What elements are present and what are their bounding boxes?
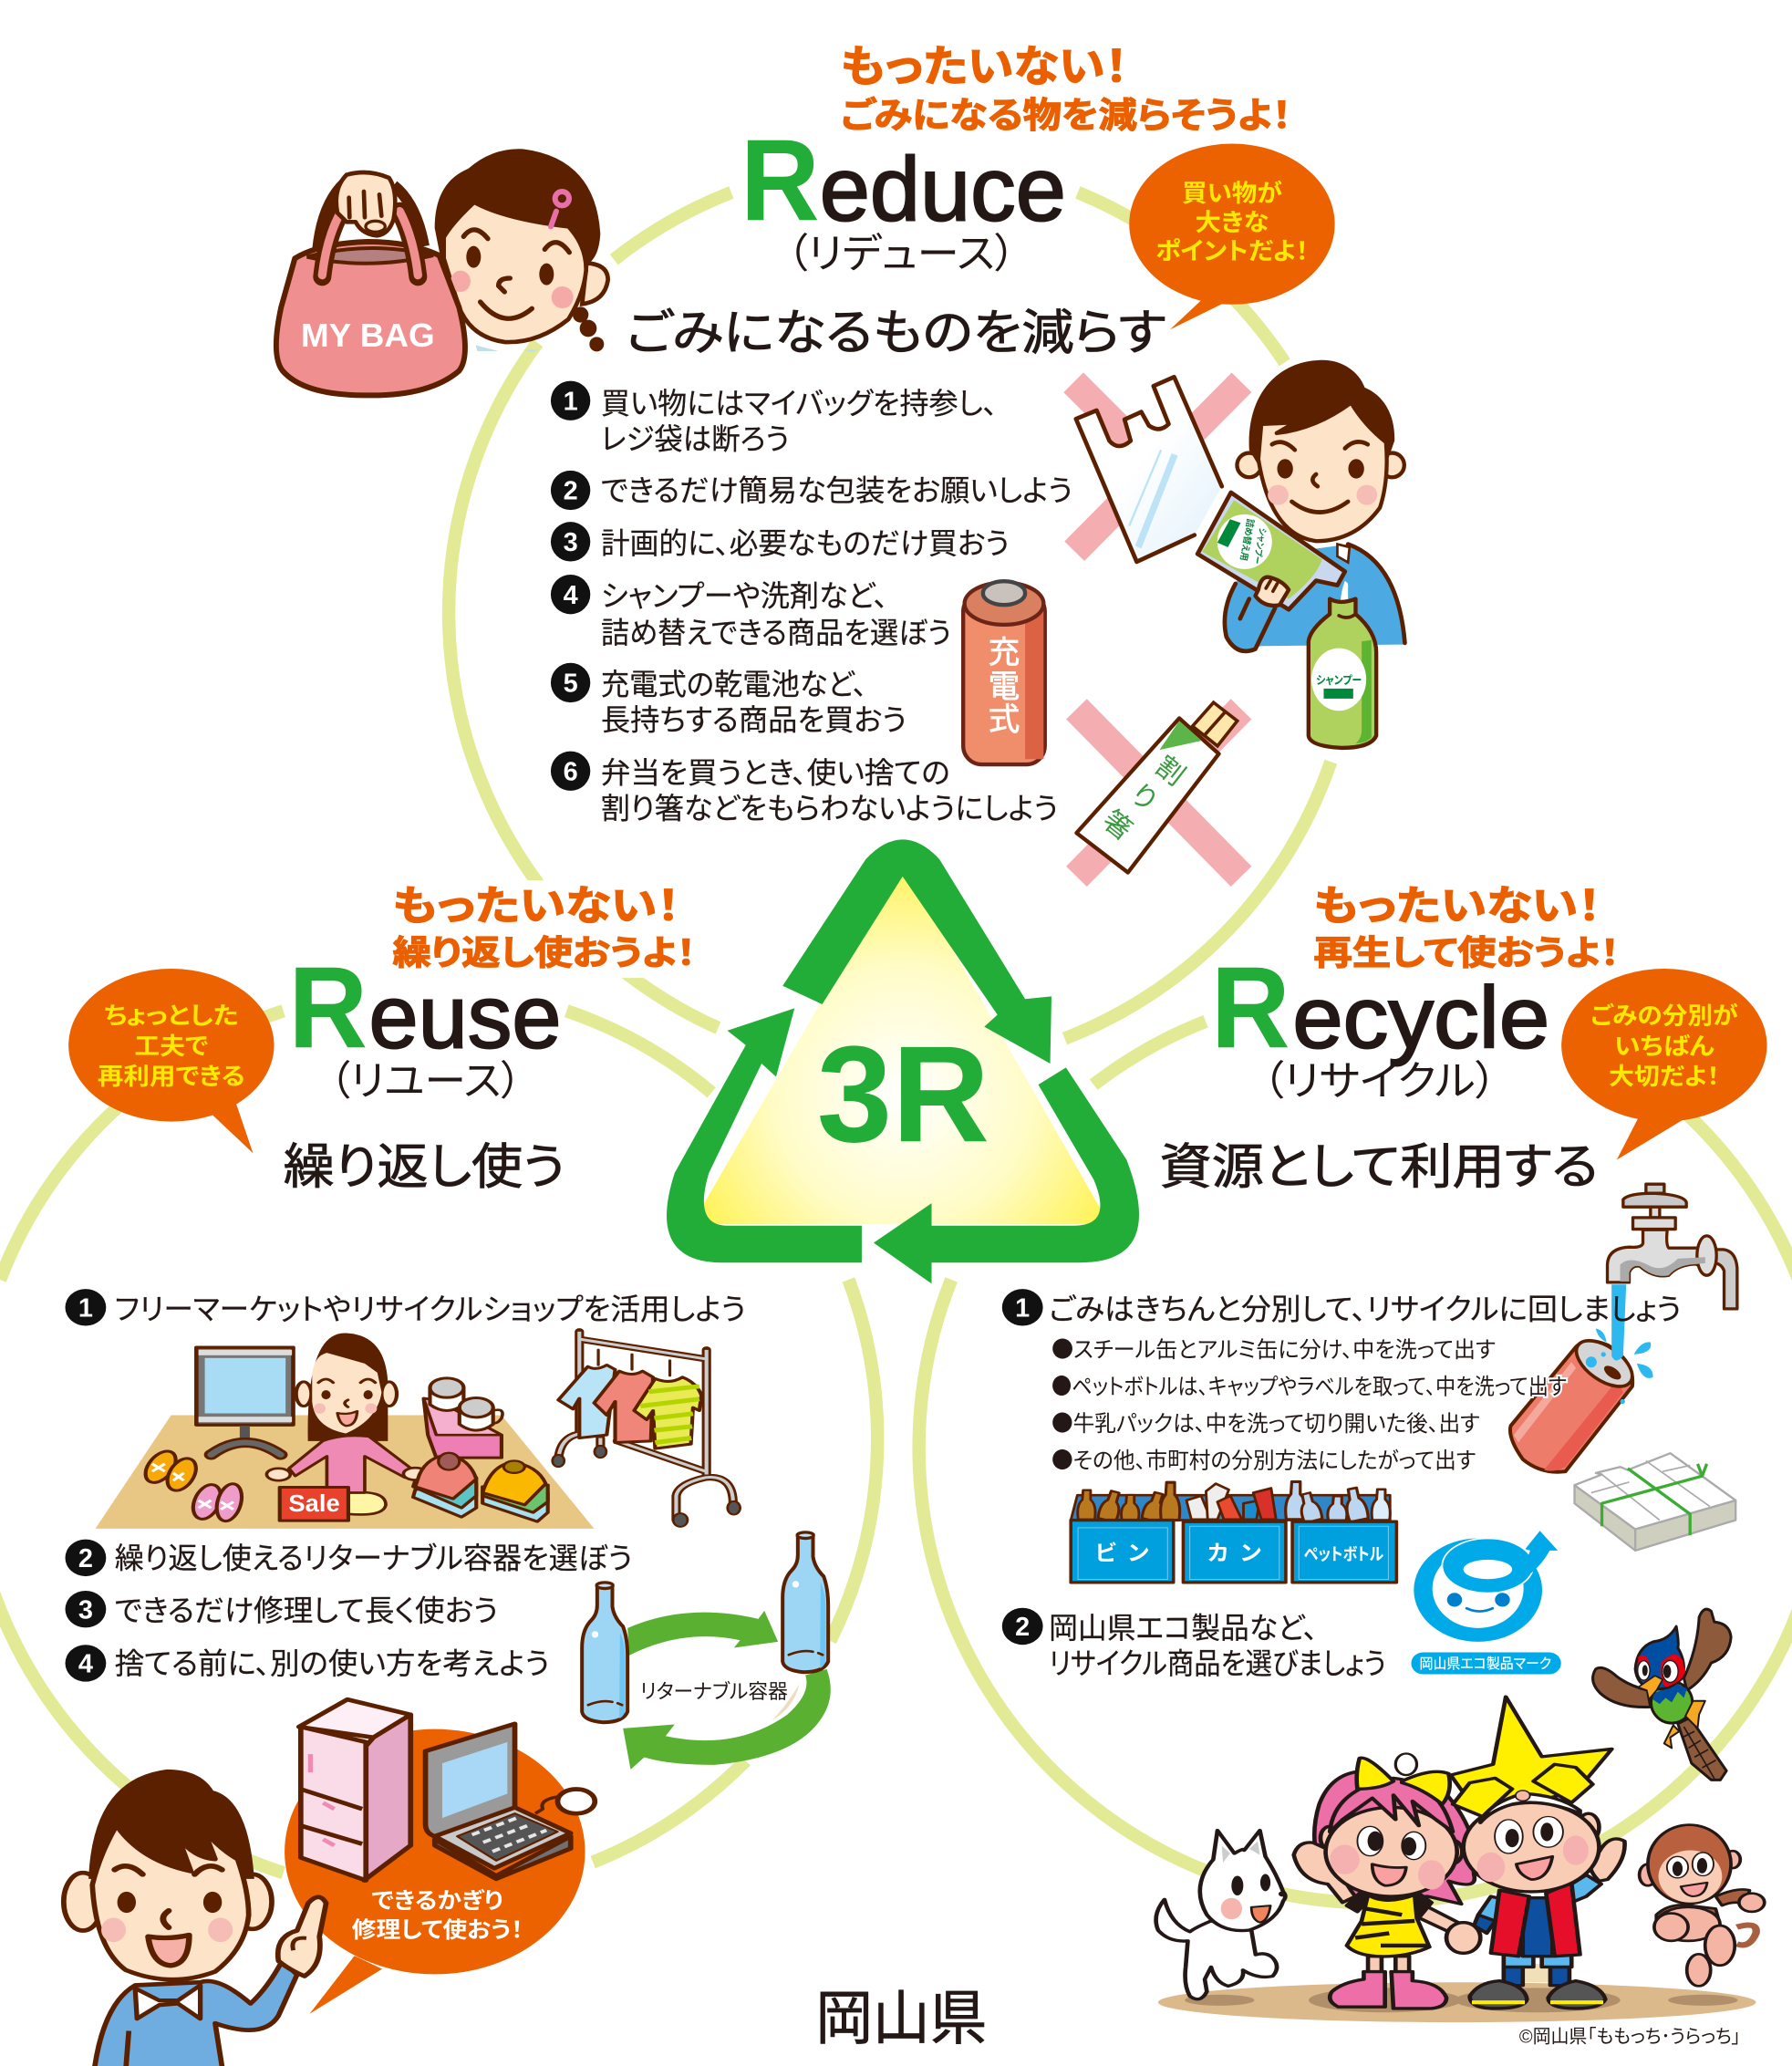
list: reduce: 1 — [564, 387, 578, 416]
heading: reduce: ごみになるものを減らす — [626, 306, 1166, 360]
title: Recycle: R — [1211, 943, 1290, 1073]
slogan: reduce: もったいない！ — [841, 44, 1128, 92]
character: monkey — [1640, 1825, 1765, 1986]
speech bubble: reuse: 工夫で — [134, 1033, 209, 1060]
list: reduce: 計画的に、必要なものだけ買おう — [601, 527, 1010, 560]
list: recycle: 岡山県エコ製品など、 — [1049, 1612, 1318, 1645]
list: recycle: ●ペットボトルは、キャップやラベルを取って、中を洗って出す — [1051, 1370, 1567, 1402]
icon: newspaper bundle — [1575, 1453, 1735, 1551]
panel: Reduce — [276, 44, 1404, 877]
slogan: recycle: 再生して使おうよ！ — [1314, 934, 1620, 972]
character: Momotaro — [1446, 1697, 1625, 2009]
icon: crossed plastic bag — [1073, 377, 1241, 562]
bottle: left — [582, 1583, 627, 1722]
icon: rechargeable battery: 電 — [989, 670, 1020, 704]
speech bubble: repair — [285, 1729, 585, 2014]
icon: sorting bins: カ ン — [1207, 1542, 1261, 1565]
title: Recycle: （リサイクル） — [1262, 1059, 1497, 1105]
illustration: clothes rack — [553, 1332, 741, 1527]
list: reduce: 5 — [564, 670, 578, 699]
list: reuse: 3 — [78, 1595, 93, 1625]
speech bubble: recycle — [1561, 969, 1767, 1159]
center 3R recycling triangle — [667, 839, 1139, 1283]
title: Reduce: （リデュース） — [787, 231, 1016, 276]
list: recycle: ●その他、市町村の分別方法にしたがって出す — [1051, 1444, 1476, 1476]
speech bubble: reuse — [68, 969, 274, 1153]
title: Reuse: R — [288, 943, 368, 1073]
slogan: reduce — [841, 44, 1291, 136]
list: reduce: できるだけ簡易な包装をお願いしよう — [601, 474, 1072, 507]
list: recycle: ●スチール缶とアルミ缶に分け、中を洗って出す — [1051, 1333, 1496, 1365]
bottle: right — [782, 1532, 828, 1672]
list: reduce: 6 — [564, 757, 578, 786]
icon: boy with shampoo refill: シャンプー — [1316, 674, 1362, 687]
list: recycle: ごみはきちんと分別して、リサイクルに回しましょう — [1049, 1293, 1682, 1325]
icon: refrigerator — [299, 1699, 410, 1881]
panel: Recycle — [1002, 884, 1767, 2022]
title: Reduce: R — [741, 115, 820, 244]
icon: aluminum can with water — [1510, 1284, 1653, 1472]
icon: crossed chopsticks: 割 — [1150, 751, 1190, 792]
icon: boy with shampoo refill: シャンプー — [1251, 527, 1268, 565]
speech bubble: reduce — [1129, 144, 1335, 329]
icon: boy with shampoo refill — [1197, 360, 1404, 748]
icon: girl with my bag: MY BAG — [301, 317, 435, 354]
eco mark label: 岡山県エコ製品マーク — [1420, 1656, 1551, 1672]
illustration: returnable bottles: リターナブル容器 — [640, 1680, 788, 1703]
list: reduce: 詰め替えできる商品を選ぼう — [601, 617, 951, 649]
list: reduce: 割り箸などをもらわないようにしよう — [601, 792, 1058, 825]
title: Reuse — [288, 943, 562, 1105]
icon: laptop and mouse — [426, 1724, 595, 1879]
slogan: recycle: もったいない！ — [1314, 884, 1600, 929]
icon: girl with my bag — [276, 149, 608, 395]
list: reduce: レジ袋は断ろう — [601, 423, 789, 456]
speech bubble: reduce: 大きな — [1195, 209, 1269, 236]
title: Reuse: （リユース） — [329, 1059, 522, 1105]
speech bubble: repair: 修理して使おう！ — [352, 1917, 523, 1943]
heading: reuse: 繰り返し使う — [284, 1141, 565, 1195]
3R label: 3R — [817, 1017, 989, 1170]
list: reduce — [551, 381, 1072, 825]
list: reduce: 2 — [564, 477, 578, 506]
slogan: reuse: 繰り返し使おうよ！ — [393, 934, 696, 972]
icon: rechargeable battery: 式 — [989, 702, 1020, 737]
character: girl Uratchi — [1294, 1753, 1480, 2009]
list: recycle: 1 — [1015, 1293, 1030, 1323]
icon: crossed chopsticks: 箸 — [1097, 805, 1138, 846]
title: Recycle — [1211, 943, 1549, 1105]
list: recycle: リサイクル商品を選びましょう — [1049, 1647, 1386, 1680]
speech bubble: recycle: いちばん — [1614, 1033, 1714, 1060]
title: Reuse: euse — [369, 967, 562, 1067]
list: reduce: 長持ちする商品を買おう — [601, 703, 906, 736]
list: reduce: 4 — [564, 581, 578, 610]
title: Recycle: ecycle — [1292, 971, 1549, 1067]
icon: sorting bins: ビ ン — [1095, 1542, 1149, 1565]
speech bubble: reduce: ポイントだよ！ — [1155, 238, 1309, 265]
slogan: recycle — [1314, 884, 1620, 972]
icon: crossed chopsticks: り — [1125, 779, 1162, 816]
list: recycle — [1002, 1289, 1682, 1680]
slogan: reduce: ごみになる物を減らそうよ！ — [841, 97, 1291, 136]
list: recycle: 2 — [1015, 1613, 1030, 1642]
icon: boy with shampoo refill: 詰め替え用 — [1238, 518, 1257, 562]
speech bubble: repair: できるかぎり — [371, 1888, 503, 1914]
list: reduce: シャンプーや洗剤など、 — [601, 580, 888, 613]
speech bubble: recycle: 大切だよ！ — [1609, 1063, 1720, 1090]
panel: Reuse — [64, 880, 831, 2066]
credit line: ©岡山県「ももっち･うらっち」 — [1519, 2027, 1741, 2048]
character: dog — [1156, 1831, 1286, 1999]
list: recycle: ●牛乳パックは、中を洗って切り開いた後、出す — [1051, 1407, 1480, 1438]
list: reuse: できるだけ修理して長く使おう — [115, 1594, 498, 1627]
characters: ground — [1158, 1982, 1756, 2022]
icon: sorting bins — [1071, 1481, 1396, 1583]
icon: rechargeable battery: 充 — [989, 636, 1020, 670]
speech bubble: reuse: 再利用できる — [98, 1063, 245, 1090]
list: reuse: 繰り返し使えるリターナブル容器を選ぼう — [115, 1542, 633, 1574]
eco mark label — [1411, 1653, 1561, 1675]
illustration: returnable bottles — [582, 1532, 831, 1770]
footer: Okayama Prefecture: 岡山県 — [815, 1985, 987, 2051]
list: reduce: 弁当を買うとき、使い捨ての — [601, 756, 950, 789]
list: reuse — [66, 1289, 746, 1682]
icon: pheasant — [1593, 1609, 1731, 1780]
list: reduce: 買い物にはマイバッグを持参し、 — [601, 388, 998, 420]
icon: sorting bins: ペットボトル — [1304, 1545, 1383, 1564]
icon: crossed chopsticks — [1076, 702, 1241, 877]
list: reuse: フリーマーケットやリサイクルショップを活用しよう — [115, 1293, 746, 1325]
illustration: flea market — [96, 1333, 594, 1529]
list: reduce: 充電式の乾電池など、 — [601, 668, 867, 701]
title: Reduce: educe — [820, 139, 1066, 240]
list: reuse: 捨てる前に、別の使い方を考えよう — [115, 1647, 550, 1680]
title: Reduce — [741, 115, 1066, 276]
icon: rechargeable battery — [963, 581, 1045, 764]
heading: recycle: 資源として利用する — [1159, 1141, 1599, 1195]
slogan: reuse: もったいない！ — [393, 884, 680, 929]
icon: Okayama eco mark — [1411, 1531, 1561, 1675]
list: reuse: 4 — [78, 1650, 93, 1679]
speech bubble: recycle: ごみの分別が — [1590, 1002, 1738, 1030]
list: reuse: 2 — [78, 1544, 93, 1573]
icon: faucet — [1608, 1184, 1737, 1309]
list: reduce: 3 — [564, 528, 578, 557]
list: reuse: 1 — [78, 1293, 93, 1323]
speech bubble: reduce: 買い物が — [1182, 179, 1282, 207]
icon: boy pointing — [64, 1770, 326, 2066]
speech bubble: reuse: ちょっとした — [104, 1002, 239, 1030]
illustration: flea market: Sale — [288, 1490, 340, 1517]
slogan: reuse — [385, 880, 701, 978]
